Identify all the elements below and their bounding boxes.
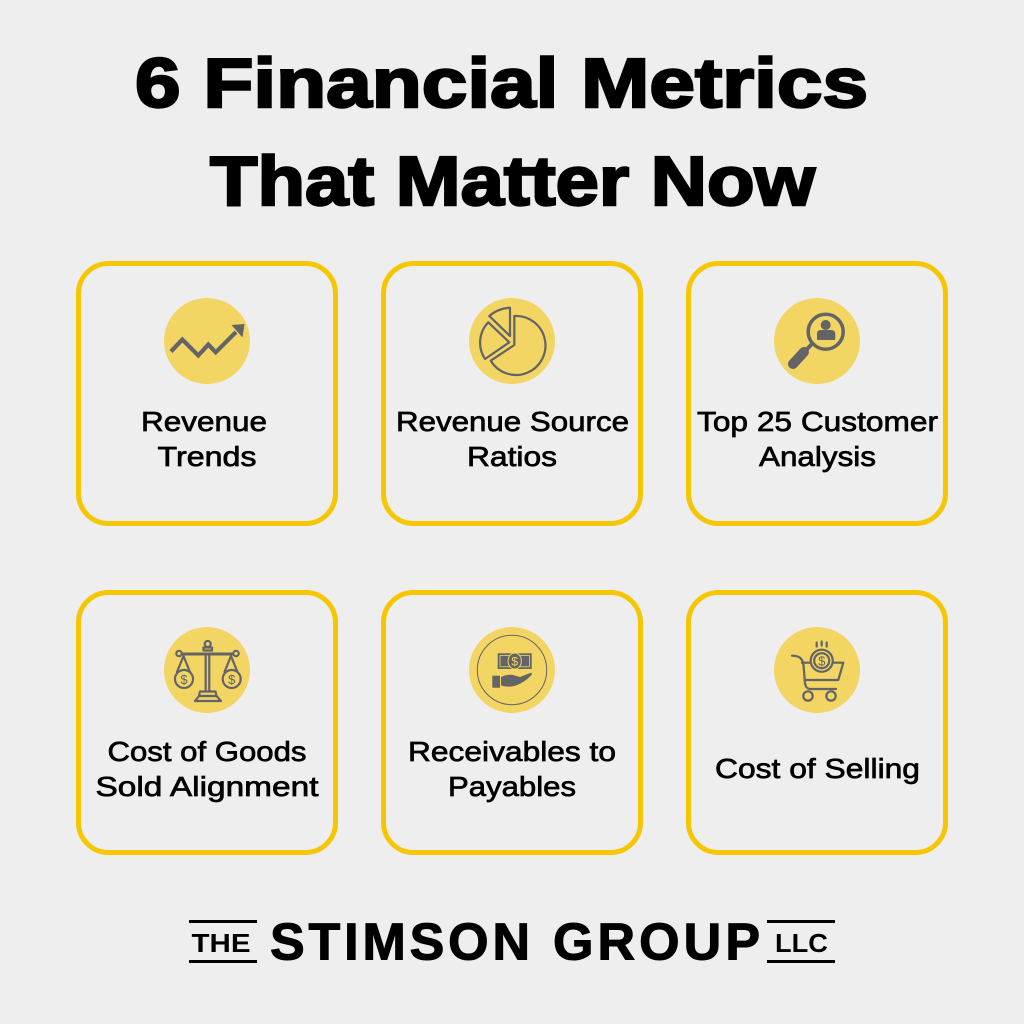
icon: shopping cart with coin: $	[818, 654, 826, 668]
panel: revenue source ratios	[384, 264, 640, 524]
title: That Matter Now	[210, 142, 816, 220]
label: revenue source ratios: Revenue Source	[396, 406, 629, 437]
label: revenue source ratios	[396, 406, 629, 472]
title: 6 Financial Metrics	[135, 44, 868, 122]
label: revenue trends: Revenue	[141, 406, 267, 437]
logo: the stimson group llc: STIMSON	[270, 914, 530, 972]
panel: top 25 customer analysis	[688, 264, 946, 524]
label: revenue trends: Trends	[158, 441, 256, 472]
icon: trending line arrow	[164, 298, 250, 384]
title	[135, 44, 868, 220]
label: revenue trends	[141, 406, 267, 472]
panel: cost of selling	[688, 592, 946, 852]
panel: revenue trends	[78, 264, 336, 524]
logo: the stimson group llc: LLC	[775, 928, 828, 958]
icon: balance scale: $	[228, 672, 236, 687]
label: cost of goods sold alignment: Cost of Goods	[108, 736, 306, 767]
icon: balance scale	[164, 627, 250, 713]
panel: receivables to payables	[384, 592, 640, 852]
logo: the stimson group llc: GROUP	[553, 914, 760, 972]
label: cost of goods sold alignment	[96, 736, 319, 802]
label: receivables to payables: Payables	[448, 771, 576, 802]
icon: hand holding cash	[469, 627, 555, 713]
logo: the stimson group llc	[189, 914, 835, 972]
icon: magnifier with person	[774, 298, 860, 384]
panel: cost of goods sold alignment	[78, 592, 336, 852]
icon: shopping cart with coin	[774, 627, 860, 713]
icon: pie chart	[469, 298, 555, 384]
label: receivables to payables: Receivables to	[408, 736, 616, 767]
label: cost of goods sold alignment: Sold Alignment	[96, 771, 319, 802]
label: receivables to payables	[408, 736, 616, 802]
label: top 25 customer analysis: Top 25 Customer	[697, 406, 938, 437]
logo: the stimson group llc: THE	[192, 928, 250, 958]
label: cost of selling: Cost of Selling	[715, 753, 920, 784]
label: revenue source ratios: Ratios	[467, 441, 557, 472]
icon: balance scale: $	[180, 672, 188, 687]
label: top 25 customer analysis: Analysis	[759, 441, 876, 472]
icon: hand holding cash: $	[511, 654, 518, 668]
label: top 25 customer analysis	[697, 406, 938, 472]
